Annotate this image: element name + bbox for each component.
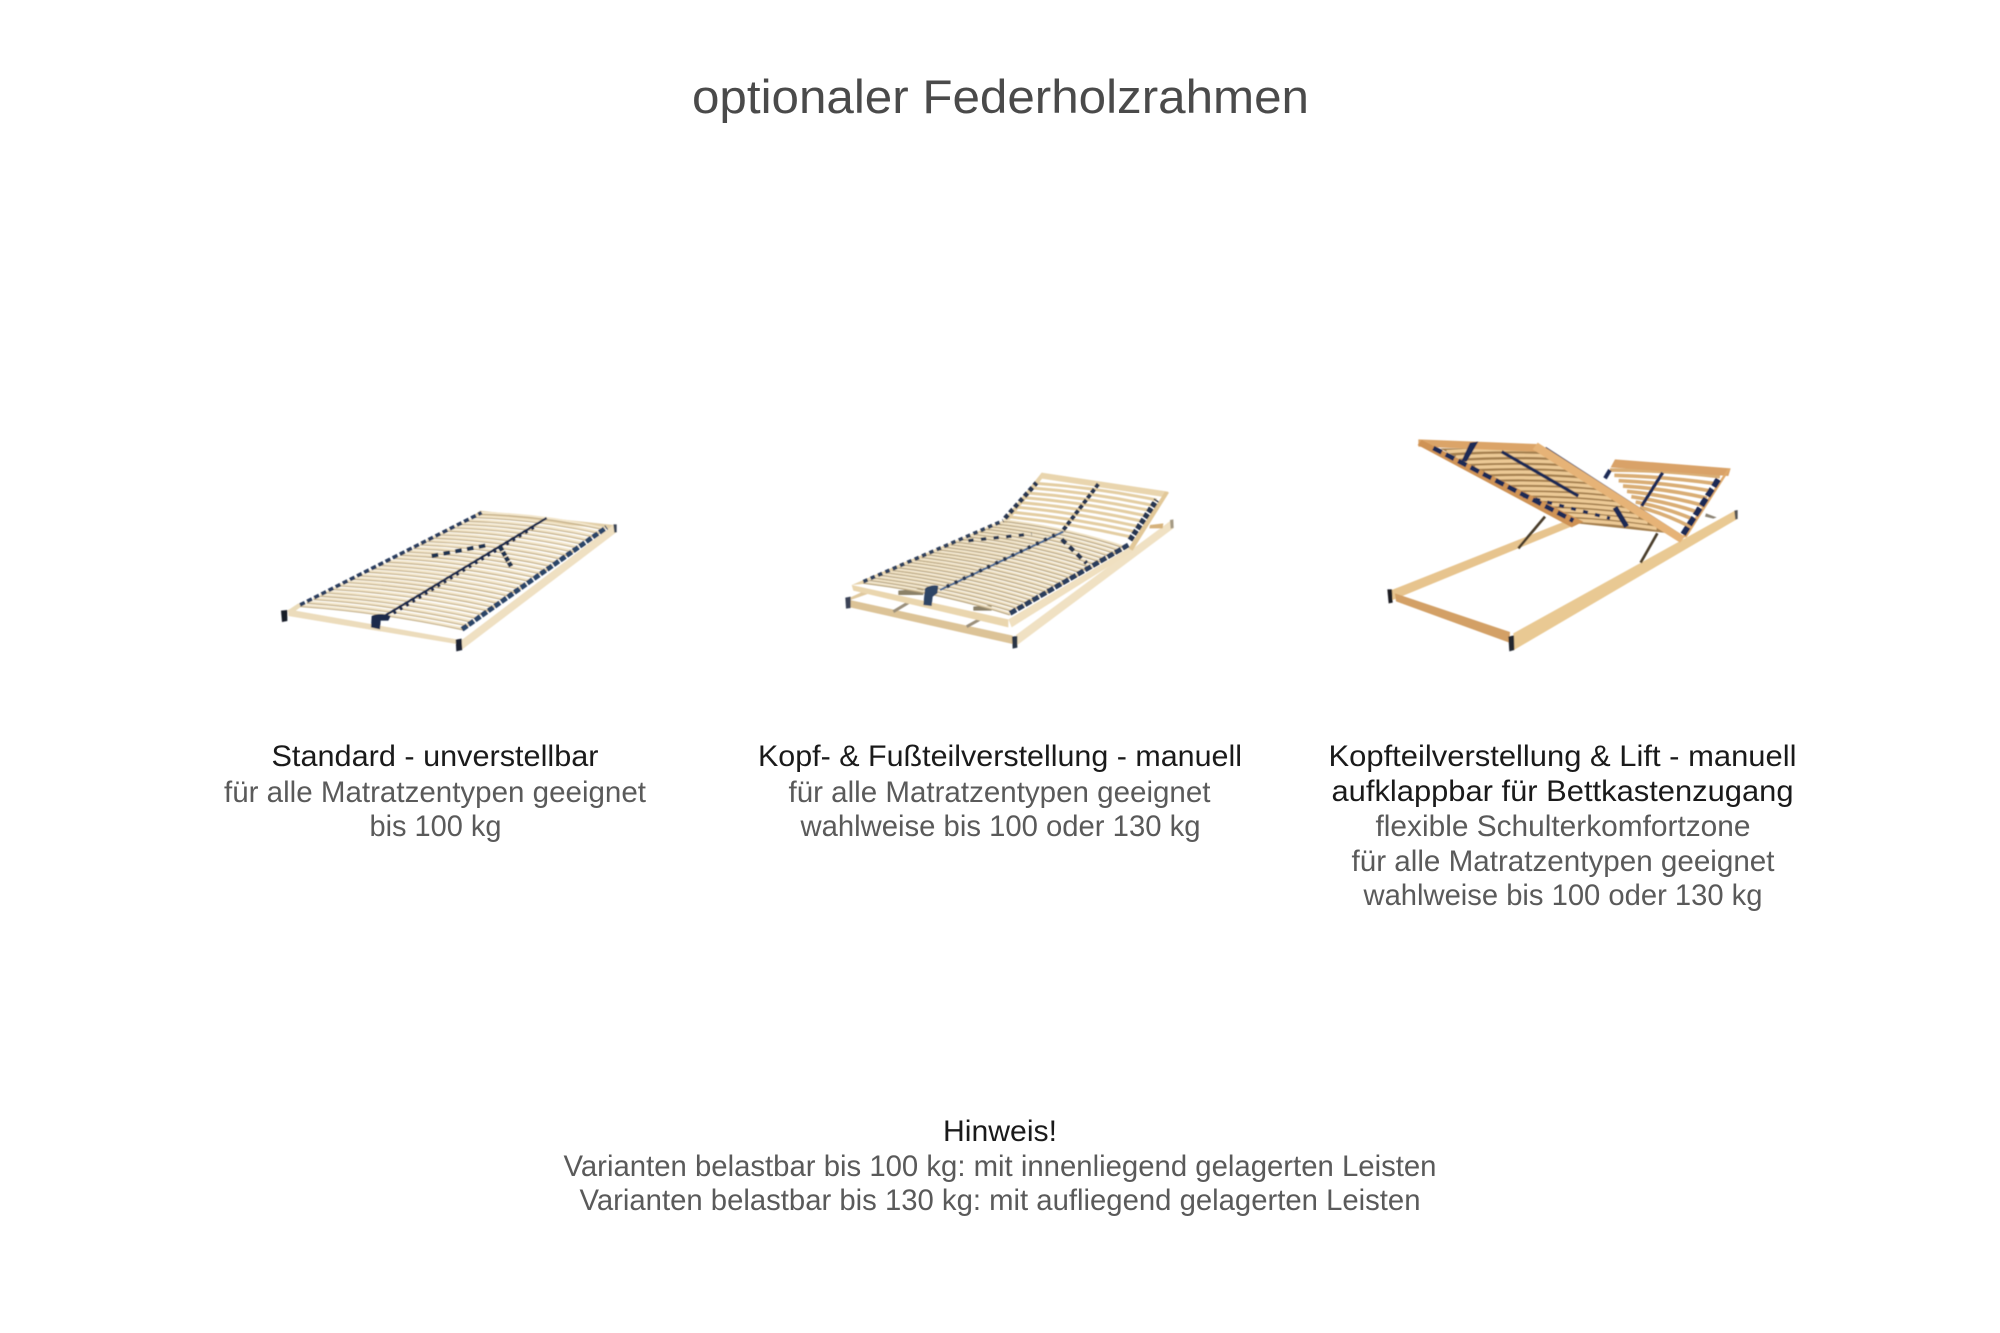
callout: Hinweis	[564, 1115, 1436, 1217]
text block: Standard details: für alle Matratzentypen geeignet	[224, 776, 647, 809]
panel: Standard	[224, 511, 647, 843]
callout: Hinweis: Varianten belastbar bis 130 kg: mit aufliegend gelagerten Leisten	[580, 1184, 1420, 1217]
heading: Kopf- und Fussteilverstellung: Kopf- & Fußteilverstellung - manuell	[758, 740, 1242, 773]
icon: adjustable slatted frame	[845, 473, 1174, 649]
heading: Kopfteilverstellung und Lift: Kopfteilverstellung & Lift - manuell	[1328, 740, 1796, 773]
heading: Standard: Standard - unverstellbar	[272, 740, 599, 773]
callout: Hinweis: Varianten belastbar bis 100 kg: mit innenliegend gelagerten Leisten	[564, 1150, 1436, 1183]
text block: Kopfteilverstellung details	[1352, 810, 1775, 912]
text block: Standard details	[224, 776, 647, 843]
text block: Kopf- und Fussteilverstellung details	[788, 776, 1211, 843]
text block: Kopf- und Fussteilverstellung details: wahlweise bis 100 oder 130 kg	[800, 810, 1200, 843]
text block: Kopf- und Fussteilverstellung details: für alle Matratzentypen geeignet	[788, 776, 1211, 809]
text block: Kopfteilverstellung details: wahlweise bis 100 oder 130 kg	[1363, 879, 1762, 912]
heading: Kopfteilverstellung und Lift	[1328, 740, 1796, 808]
text block: Kopfteilverstellung details: für alle Matratzentypen geeignet	[1352, 845, 1775, 878]
icon: lifted slatted frame	[1387, 439, 1738, 651]
callout: Hinweis: Hinweis!	[943, 1115, 1057, 1148]
panel: Kopfteilverstellung und Lift	[1328, 439, 1796, 912]
text block: Kopfteilverstellung details: flexible Schulterkomfortzone	[1376, 810, 1750, 843]
panel: Kopf- und Fussteilverstellung	[758, 473, 1242, 843]
text block: Standard details: bis 100 kg	[370, 810, 502, 843]
icon: flat slatted frame	[281, 511, 617, 651]
heading: Kopfteilverstellung und Lift: aufklappbar für Bettkastenzugang	[1332, 775, 1794, 808]
title: optionaler Federholzrahmen	[692, 70, 1309, 123]
